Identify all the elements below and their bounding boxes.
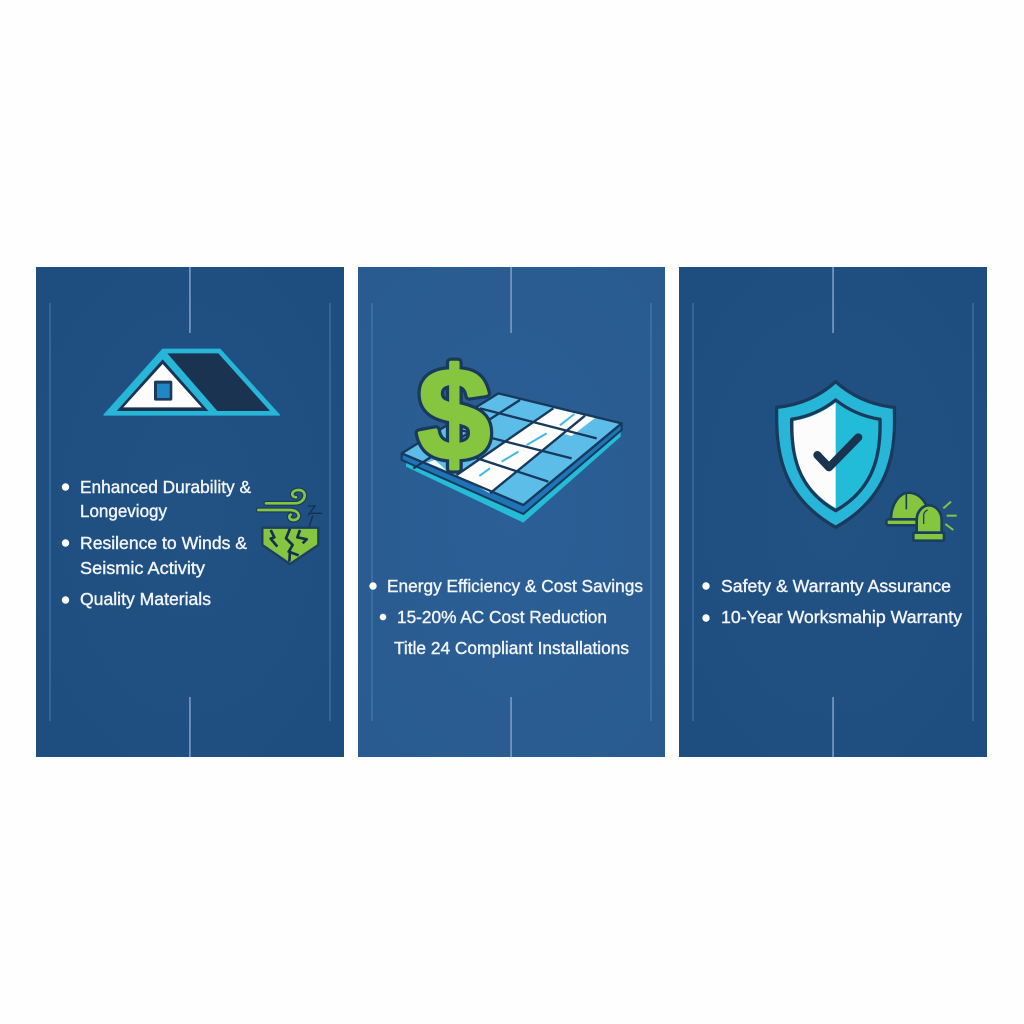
- bullet list: durability: Longeviogy: [80, 501, 167, 521]
- cracked ground: [262, 528, 318, 564]
- panel: energy savings: [358, 267, 665, 757]
- panel background: [358, 267, 665, 757]
- icon: hard hat and alarm: [886, 493, 957, 541]
- hard hat: [886, 493, 930, 525]
- bullet list: safety: Safety & Warranty Assurance: [721, 576, 951, 596]
- alarm rays: [943, 502, 957, 530]
- bullet list: durability: Resilence to Winds &: [80, 533, 247, 553]
- icon: dollar sign: $: [418, 341, 490, 487]
- icon: shield with checkmark: [777, 382, 895, 527]
- wind lines: [258, 490, 322, 526]
- icon: solar panel: [402, 393, 622, 523]
- bullet list: energy: [369, 576, 643, 658]
- bullet list: energy: Energy Efficiency & Cost Savings: [387, 576, 643, 596]
- bullet list: durability: [62, 477, 251, 609]
- icon: wind and seismic crack: [258, 490, 322, 564]
- bullet list: durability: Quality Materials: [80, 589, 211, 609]
- bullet list: safety: 10-Year Worksmahip Warranty: [721, 607, 962, 627]
- bullet list: energy: 15-20% AC Cost Reduction: [397, 607, 607, 627]
- panel background: [679, 267, 987, 757]
- panel: safety and warranty: [679, 267, 987, 757]
- bullet list: energy: Title 24 Compliant Installations: [394, 638, 629, 658]
- panel: durability: [36, 267, 344, 757]
- bullet list: durability: Seismic Activity: [80, 558, 205, 578]
- bullet list: safety: [702, 576, 962, 627]
- alarm light: [913, 505, 944, 541]
- bullet list: durability: Enhanced Durability &: [80, 477, 251, 497]
- panel background: [36, 267, 344, 757]
- icon: dollar sign: $: [418, 341, 490, 487]
- icon: roof: [104, 349, 279, 415]
